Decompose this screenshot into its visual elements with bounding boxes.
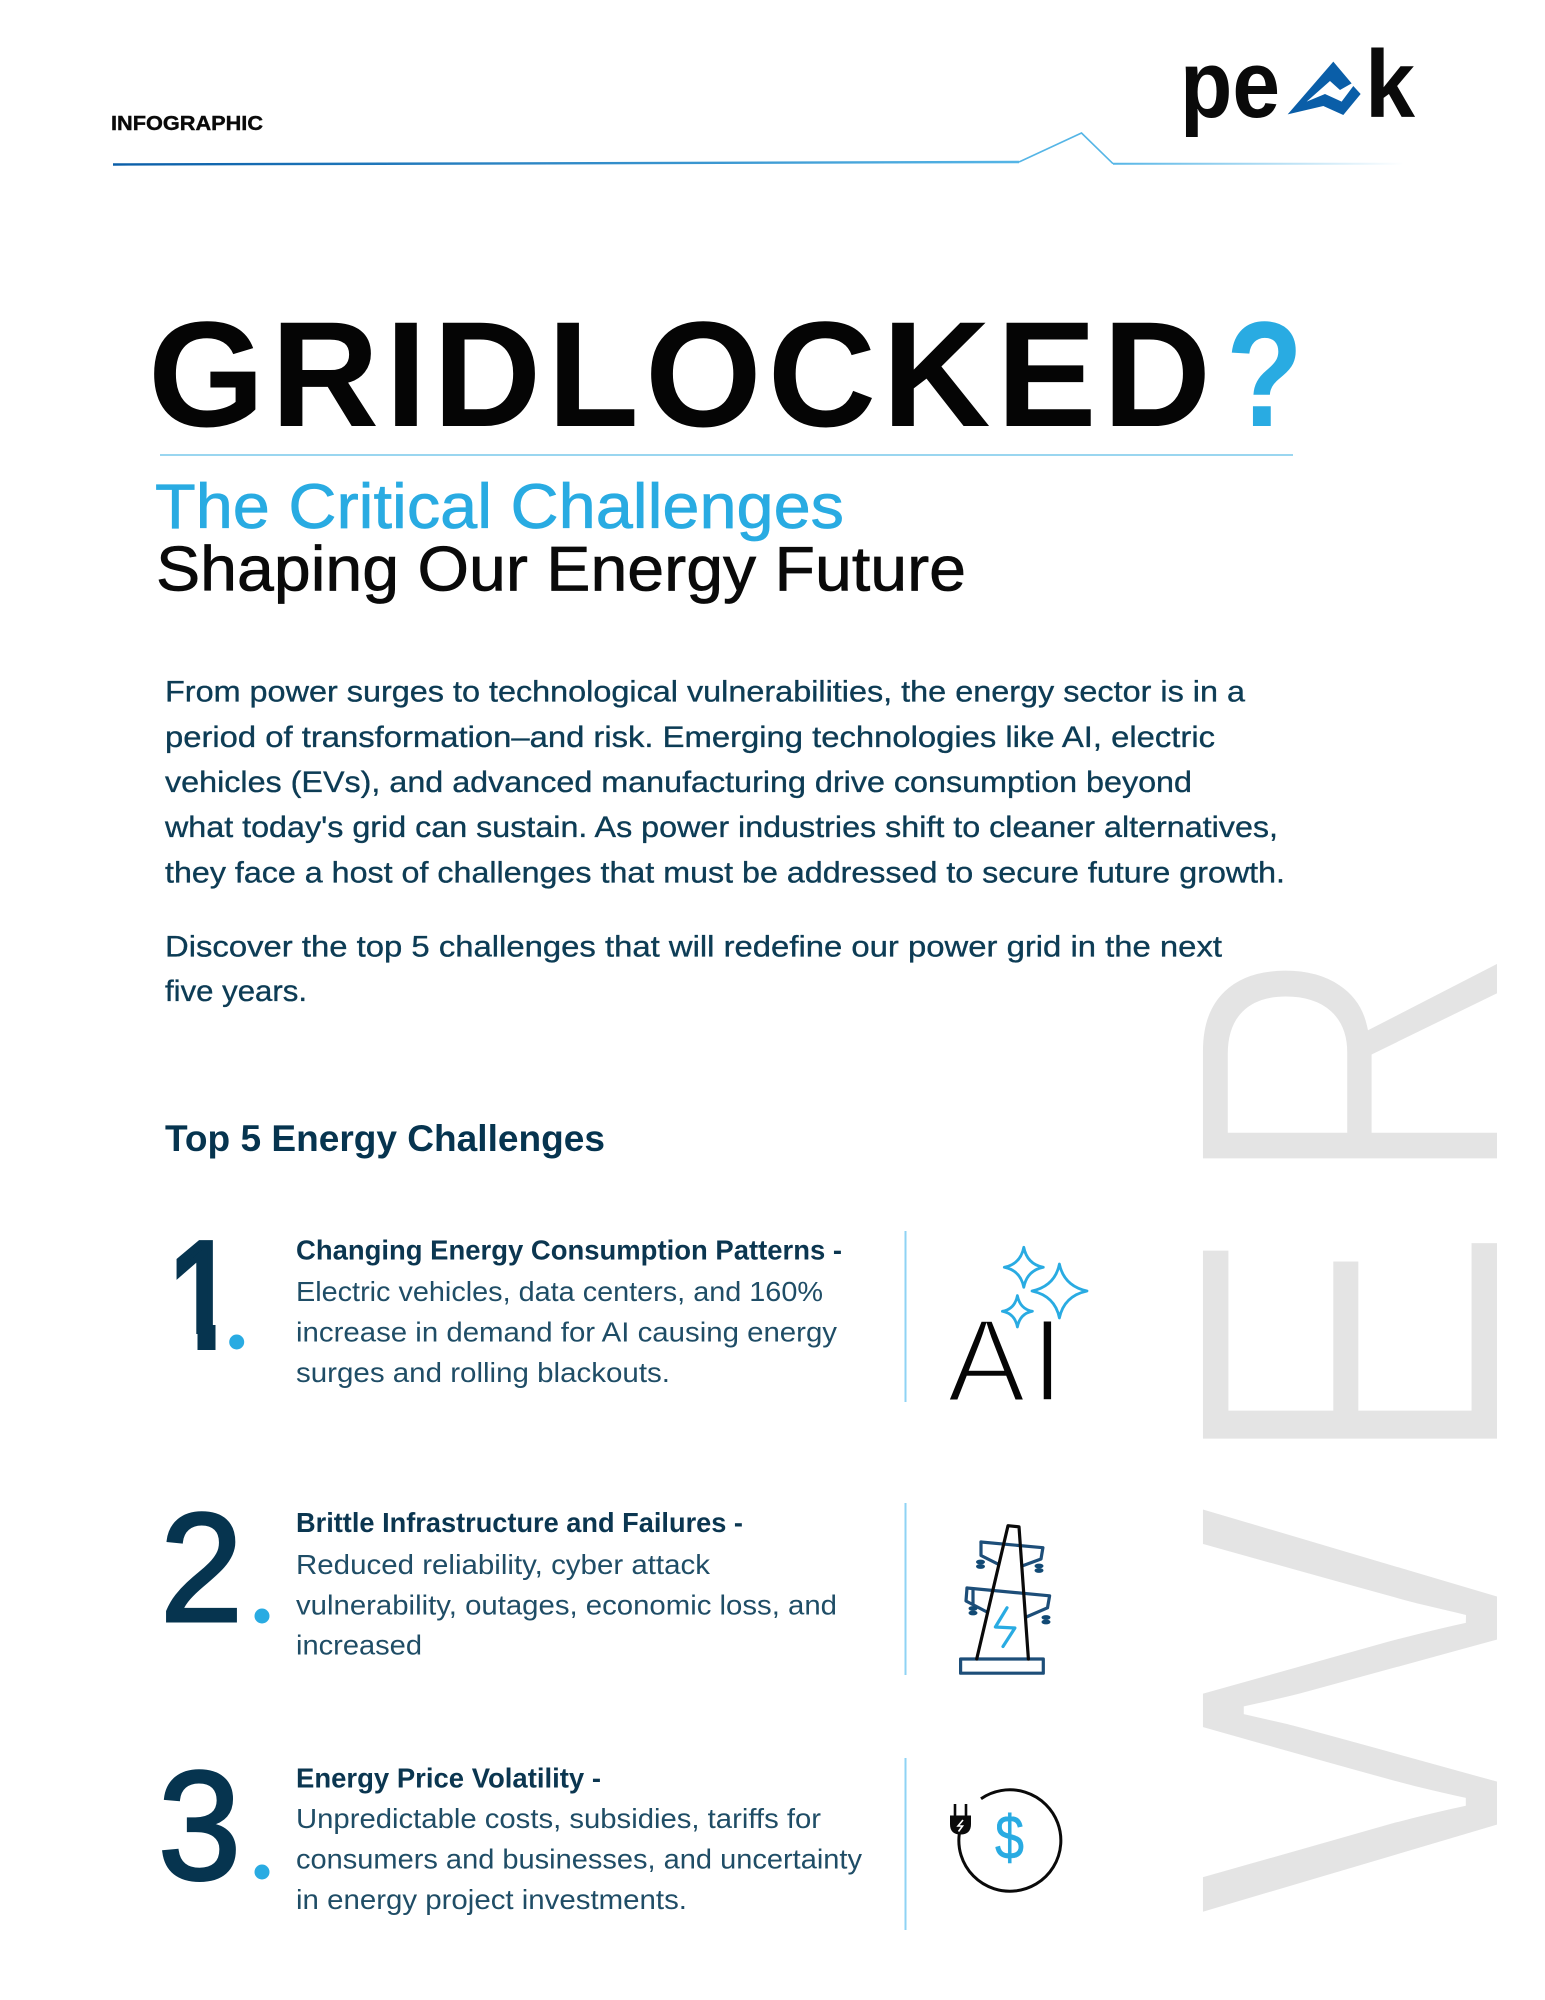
text 3: consumers and businesses, and uncertainty: [296, 1844, 862, 1875]
subtitle: [155, 472, 966, 604]
logo: peak: k: [1365, 31, 1416, 138]
intro paragraph: they face a host of challenges that must be addressed to secure future growth.: [165, 856, 1285, 890]
subtitle: Shaping Our Energy Future: [156, 534, 966, 604]
watermark: WER: [1104, 942, 1545, 1919]
text 2: vulnerability, outages, economic loss, and: [296, 1589, 837, 1620]
title rule: [160, 454, 1293, 456]
icon: plug and dollar: $: [995, 1804, 1024, 1873]
logo: peak: pe: [1180, 31, 1280, 138]
text 3: Unpredictable costs, subsidies, tariffs for: [296, 1803, 821, 1834]
text 3: [296, 1762, 862, 1915]
number 1: [176, 1240, 244, 1350]
text 2: Brittle Infrastructure and Failures -: [296, 1507, 743, 1538]
logo: peak: [1180, 31, 1416, 138]
intro paragraph: From power surges to technological vulnerabilities, the energy sector is in a: [165, 676, 1245, 708]
text 1: [296, 1235, 842, 1388]
text 1: increase in demand for AI causing energy: [296, 1317, 837, 1348]
header line with peak: [113, 133, 1404, 164]
label: infographic: INFOGRAPHIC: [111, 113, 263, 135]
section heading: Top 5 Energy Challenges: [165, 1118, 605, 1159]
text 2: Reduced reliability, cyber attack: [296, 1549, 710, 1580]
divider 1: [904, 1231, 906, 1402]
title: ?: [1226, 290, 1303, 458]
icon: AI sparkles: [947, 1247, 1087, 1427]
intro paragraph: vehicles (EVs), and advanced manufacturing drive consumption beyond: [165, 766, 1192, 799]
discover paragraph: Discover the top 5 challenges that will redefine our power grid in the next: [165, 930, 1223, 964]
text 3: Energy Price Volatility -: [296, 1762, 601, 1794]
divider 3: [904, 1758, 906, 1930]
icon: plug and dollar: [950, 1790, 1061, 1891]
title: GRIDLOCKED: [148, 290, 1211, 458]
intro paragraph: [164, 676, 1285, 890]
discover paragraph: five years.: [165, 975, 307, 1008]
intro paragraph: what today's grid can sustain. As power industries shift to cleaner alternatives,: [164, 811, 1278, 844]
number 3: 3: [158, 1739, 241, 1912]
divider 2: [904, 1503, 906, 1675]
icon: transmission tower: [961, 1526, 1050, 1673]
text 1: surges and rolling blackouts.: [296, 1357, 670, 1388]
challenge 3: [158, 1739, 1061, 1930]
text 2: increased: [296, 1630, 422, 1660]
challenge 1: [176, 1231, 1088, 1402]
subtitle: The Critical Challenges: [155, 472, 844, 542]
text 2: [296, 1507, 837, 1660]
text 1: Electric vehicles, data centers, and 160%: [296, 1276, 823, 1307]
challenge 2: [160, 1481, 1050, 1675]
number 1: 1: [167, 1210, 238, 1383]
icon: AI sparkles: AI: [947, 1295, 1064, 1427]
discover paragraph: [165, 930, 1223, 1008]
intro paragraph: period of transformation–and risk. Emerging technologies like AI, electric: [165, 721, 1215, 754]
text 1: Changing Energy Consumption Patterns -: [296, 1235, 842, 1266]
text 3: in energy project investments.: [296, 1884, 687, 1915]
number 2: 2: [160, 1481, 243, 1654]
